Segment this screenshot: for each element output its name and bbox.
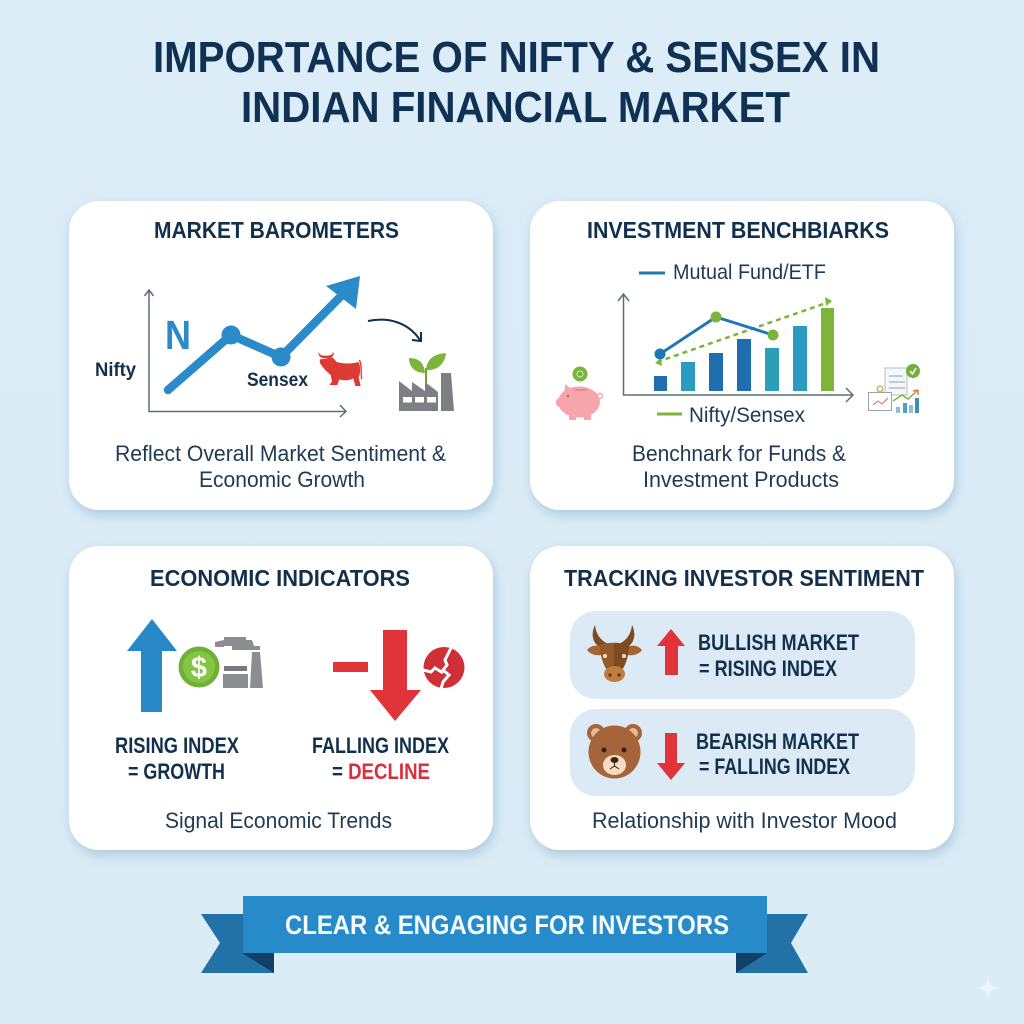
icon: sparkle xyxy=(977,977,999,999)
description: Signal Economic Trends xyxy=(165,808,392,833)
icon: dollar coin: $ xyxy=(191,652,207,684)
panel: investment benchmarks xyxy=(530,201,954,510)
icon: bear head xyxy=(587,724,642,778)
icon: piggy bank xyxy=(556,366,602,420)
arrow: up xyxy=(657,629,685,675)
icon: minus xyxy=(333,662,368,672)
description: Reflect Overall Market Sentiment & xyxy=(115,441,446,466)
text: bullish: BULLISH MARKET xyxy=(698,630,859,655)
title: INDIAN FINANCIAL MARKET xyxy=(241,84,790,132)
line chart: nifty and sensex: Nifty xyxy=(95,360,136,381)
description: Relationship with Investor Mood xyxy=(592,808,897,833)
heading: tracking investor sentiment: TRACKING INVESTOR SENTIMENT xyxy=(564,565,924,591)
icon: curved arrow xyxy=(368,320,421,341)
heading: market barometers: MARKET BAROMETERS xyxy=(154,217,399,243)
panel: investment benchmarks: Investment Products xyxy=(643,467,839,492)
text: falling index: FALLING INDEX xyxy=(312,733,449,758)
panel: market barometers: Economic Growth xyxy=(199,467,365,492)
heading: economic indicators: ECONOMIC INDICATORS xyxy=(150,565,410,591)
legend: nifty sensex: Nifty/Sensex xyxy=(689,404,806,427)
heading: investment benchmarks: INVESTMENT BENCHBIARKS xyxy=(587,217,889,243)
text: bearish xyxy=(696,729,859,779)
text: rising index: RISING INDEX xyxy=(115,733,239,758)
icon: report with chart xyxy=(868,364,920,413)
legend: mutual fund: Mutual Fund/ETF xyxy=(673,261,826,284)
icon: factory with sprout xyxy=(399,353,454,411)
arrow: rising xyxy=(127,619,177,712)
text: bearish: BEARISH MARKET xyxy=(696,729,859,754)
description: Benchnark for Funds & xyxy=(632,441,846,466)
card: bearish market xyxy=(570,709,915,796)
text: bearish: = FALLING INDEX xyxy=(699,754,850,779)
icon: red bull xyxy=(318,352,362,386)
text: falling index: = DECLINE xyxy=(332,759,430,784)
text: bullish xyxy=(698,630,859,681)
panel: tracking investor sentiment xyxy=(530,546,954,850)
text: bullish: = RISING INDEX xyxy=(699,656,837,681)
text: rising index: = GROWTH xyxy=(128,759,225,784)
panel: market barometers xyxy=(69,201,493,510)
card: bullish market xyxy=(570,611,915,699)
bar chart xyxy=(618,294,853,402)
text: falling index xyxy=(312,733,449,784)
line chart: nifty and sensex xyxy=(95,276,360,417)
icon: factory xyxy=(215,637,263,688)
arrow: falling xyxy=(370,630,421,721)
arrow: down xyxy=(657,733,685,780)
line chart: nifty and sensex: N xyxy=(165,312,191,358)
text: rising index xyxy=(115,733,239,784)
icon: dollar coin xyxy=(178,646,220,688)
icon: cracked globe xyxy=(423,647,464,689)
banner xyxy=(201,896,808,973)
title xyxy=(153,34,880,132)
title: IMPORTANCE OF NIFTY & SENSEX IN xyxy=(153,34,880,82)
banner: CLEAR & ENGAGING FOR INVESTORS xyxy=(285,910,729,940)
line chart: nifty and sensex: Sensex xyxy=(247,370,308,391)
panel: economic indicators xyxy=(69,546,493,850)
icon: bull head xyxy=(587,625,642,682)
